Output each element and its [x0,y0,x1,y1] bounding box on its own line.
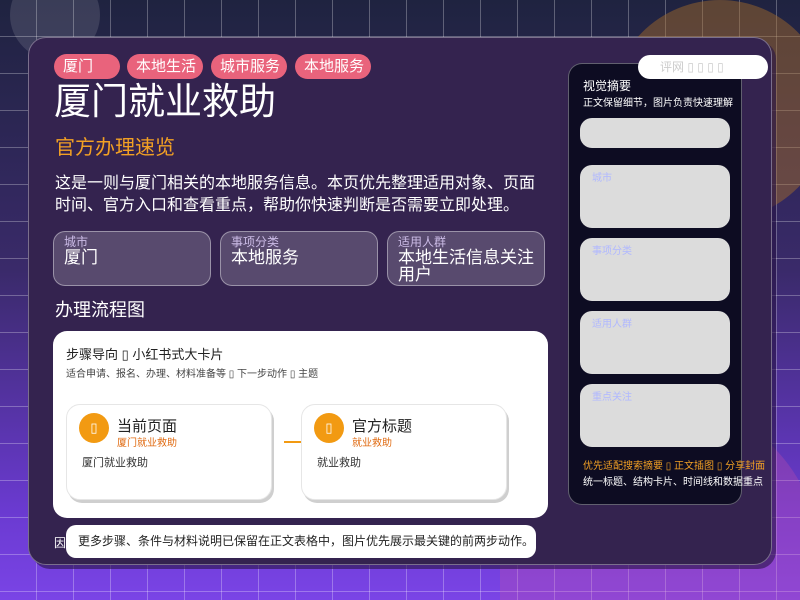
flow panel [53,331,548,518]
decorative circle right [610,0,800,220]
footer note [54,525,536,558]
tag: 城市服务 [211,54,287,79]
summary cards [580,118,730,447]
intro paragraph: 这是一则与厦门相关的本地服务信息。本页优先整理适用对象、页面时间、官方入口和查看重点，帮助你快速判断是否需要立即处理。 [55,175,535,214]
summary card 5 [580,384,730,447]
flow header: 步骤导向 ▯ 小红书式大卡片 [66,347,223,362]
summary card 4 [580,311,730,374]
card: 适用人群: 适用人群 [398,235,446,249]
card: 城市: 厦门 [64,248,98,267]
step 1: 当前页面 [117,418,177,435]
summary card 2: 城市 [592,173,612,184]
top right pill [638,55,768,79]
footer note: 更多步骤、条件与材料说明已保留在正文表格中，图片优先展示最关键的前两步动作。 [78,534,534,548]
tag: 本地生活 [127,54,203,79]
flow header: 适合申请、报名、办理、材料准备等 ▯ 下一步动作 ▯ 主题 [66,369,318,380]
card: 适用人群: 本地生活信息关注用户 [398,248,534,284]
step 1 [66,404,272,500]
card: 适用人群 [387,231,545,286]
tag: 厦门: 厦门 [63,58,93,75]
step 2: ▯ [325,420,333,435]
step 1: 厦门就业救助 [117,438,177,449]
tag: 本地生活: 本地生活 [136,58,196,75]
tags [54,54,371,79]
summary heading: 正文保留细节，图片负责快速理解 [583,98,733,109]
card: 事项分类 [220,231,378,286]
title: 厦门就业救助 [54,81,276,122]
flow header [66,347,318,380]
section heading: 办理流程图 [55,300,145,320]
top right pill: 评网 ▯ ▯ ▯ ▯ [660,60,724,74]
tag: 本地服务 [295,54,371,79]
summary card 2 [580,165,730,228]
step 2: 就业救助 [352,438,392,449]
right summary panel [568,63,742,505]
summary footer [583,460,765,488]
summary card 1 [580,118,730,148]
footer note: 因 [54,536,66,550]
step 2 [301,404,507,500]
tag: 本地服务: 本地服务 [304,58,364,75]
card: 城市 [53,231,211,286]
tag: 城市服务: 城市服务 [220,58,280,75]
step 1: 厦门就业救助 [82,457,148,469]
summary footer: 统一标题、结构卡片、时间线和数据重点 [583,477,763,488]
subtitle: 官方办理速览 [55,137,175,159]
summary card 5: 重点关注 [592,392,632,403]
arrow [284,441,302,443]
tag: 厦门 [54,54,120,79]
summary heading: 视觉摘要 [583,79,631,93]
summary heading [583,79,733,109]
summary card 3 [580,238,730,301]
decorative circle bottom-right [500,400,800,600]
step 2: 就业救助 [317,457,361,469]
summary footer: 优先适配搜索摘要 ▯ 正文插图 ▯ 分享封面 [583,461,765,472]
step 1: ▯ [90,420,98,435]
info cards [53,231,545,286]
decorative circle top-left [10,0,100,60]
card: 事项分类: 事项分类 [231,235,279,249]
summary card 4: 适用人群 [592,319,632,330]
summary card 3: 事项分类 [592,246,632,257]
step 2: 官方标题 [352,418,412,435]
card: 事项分类: 本地服务 [231,248,299,267]
card: 城市: 城市 [64,235,88,249]
